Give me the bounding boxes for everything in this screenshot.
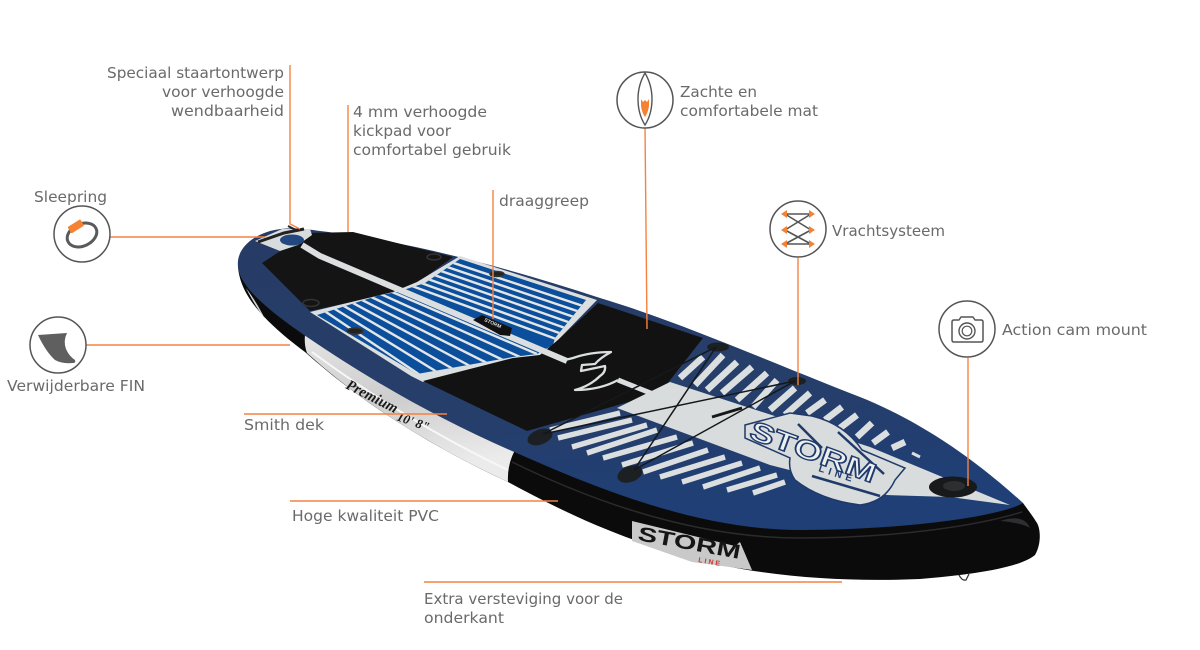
icon: fin — [30, 317, 86, 373]
leader line: Smith deck — [244, 413, 447, 415]
text: kickpad: comfortabel gebruik — [353, 141, 511, 159]
blue striped pad — [317, 259, 586, 374]
lower stripes — [550, 413, 785, 493]
text: fin: Verwijderbare FIN — [7, 377, 145, 395]
text: underside: Extra versteviging voor de — [424, 590, 623, 608]
text: mat: comfortabele mat — [680, 102, 818, 120]
front mat — [423, 303, 703, 431]
premium side text: 10' 8" — [395, 409, 432, 434]
leader line: action cam — [967, 358, 969, 486]
grey centre band and nose — [617, 382, 1010, 505]
fin tip below nose — [959, 574, 969, 580]
shark logo — [565, 352, 618, 390]
storm line deck logo — [745, 413, 905, 505]
icon: cargo system — [770, 201, 826, 257]
rail separator — [512, 462, 1022, 538]
sidewall seam — [312, 352, 508, 470]
storm line deck logo: STORM — [746, 415, 880, 489]
icon: soft mat — [617, 72, 673, 128]
leader line: PVC — [290, 500, 558, 502]
text: kickpad: 4 mm verhoogde — [353, 103, 487, 121]
text: tail design: voor verhoogde — [162, 83, 284, 101]
leader line: cargo system — [797, 258, 799, 385]
text: underside — [424, 590, 623, 627]
white sidewall — [305, 335, 515, 482]
leader line: fin — [86, 344, 290, 346]
bungee cords — [525, 342, 806, 486]
text: Smith deck: Smith dek — [244, 416, 324, 434]
icon: tow ring — [54, 206, 110, 262]
premium side text — [343, 377, 432, 434]
storm line side badge: STORM — [636, 523, 742, 564]
leader line: kickpad — [347, 105, 349, 232]
carry handle — [473, 315, 512, 336]
text: kickpad — [353, 103, 511, 159]
text: cargo system: Vrachtsysteem — [832, 222, 945, 240]
text: action cam: Action cam mount — [1002, 321, 1147, 339]
storm line deck logo: LINE — [817, 463, 857, 486]
carry handle: STORM — [483, 317, 502, 330]
rear mat — [262, 232, 453, 311]
board — [238, 226, 1040, 580]
hull silhouette — [238, 240, 1040, 580]
white pad frame — [310, 256, 597, 382]
action cam mount — [929, 476, 977, 498]
leader line: underside — [424, 581, 842, 583]
leader line: carry handle — [492, 190, 494, 319]
tail pad and handle — [255, 226, 312, 251]
text: tail design: wendbaarheid — [171, 102, 284, 120]
navy deck — [238, 228, 1023, 530]
icon: action camera — [939, 301, 995, 357]
text: mat: Zachte en — [680, 83, 757, 101]
text: mat — [680, 83, 818, 120]
text: kickpad: kickpad voor — [353, 122, 452, 140]
text: tail design: Speciaal staartontwerp — [107, 64, 284, 82]
text: underside: onderkant — [424, 609, 504, 627]
leader line: tow ring — [110, 236, 265, 238]
text: PVC: Hoge kwaliteit PVC — [292, 507, 439, 525]
text: carry handle: draaggreep — [499, 192, 589, 210]
deck rings — [303, 254, 504, 334]
premium side text: Premium — [343, 377, 400, 417]
upper stripes — [680, 355, 920, 457]
leader line: tail design — [290, 65, 300, 229]
storm line side badge: LINE — [698, 557, 722, 568]
text: tail design — [107, 64, 284, 120]
nose rail highlight — [1000, 518, 1030, 528]
tail sidewall highlight — [246, 288, 265, 319]
text: tow ring: Sleepring — [34, 188, 107, 206]
centre line — [302, 245, 567, 361]
leader line: mat — [645, 127, 647, 329]
storm line side badge — [632, 521, 752, 570]
